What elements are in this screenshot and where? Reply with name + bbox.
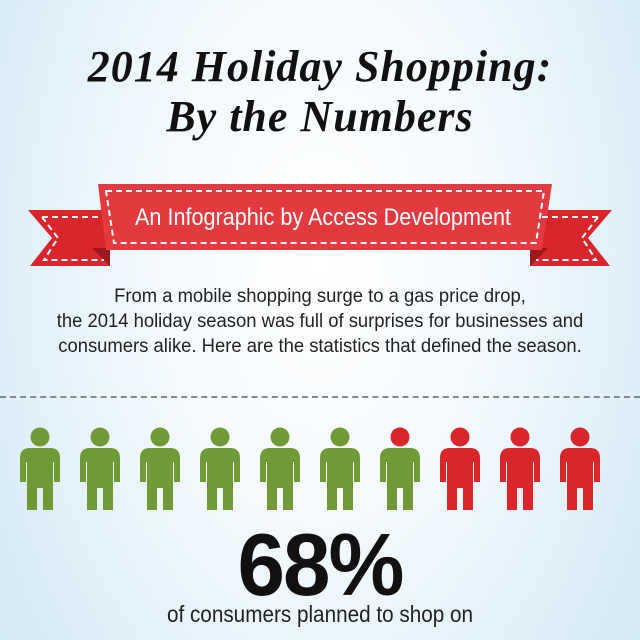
title: 2014 Holiday Shopping: — [88, 42, 552, 91]
title — [87, 42, 552, 141]
stat caption: of consumers planned to shop on — [167, 601, 473, 627]
intro text: consumers alike. Here are the statistics that defined the season. — [58, 336, 582, 357]
intro text: From a mobile shopping surge to a gas price drop, — [114, 286, 526, 307]
people icons — [20, 428, 600, 510]
title: By the Numbers — [166, 92, 474, 141]
intro text — [57, 286, 583, 357]
ribbon banner — [28, 184, 612, 266]
intro text: the 2014 holiday season was full of surprises for businesses and — [57, 311, 583, 332]
big stat: 68% — [237, 515, 403, 614]
ribbon text: An Infographic by Access Development — [135, 204, 511, 231]
